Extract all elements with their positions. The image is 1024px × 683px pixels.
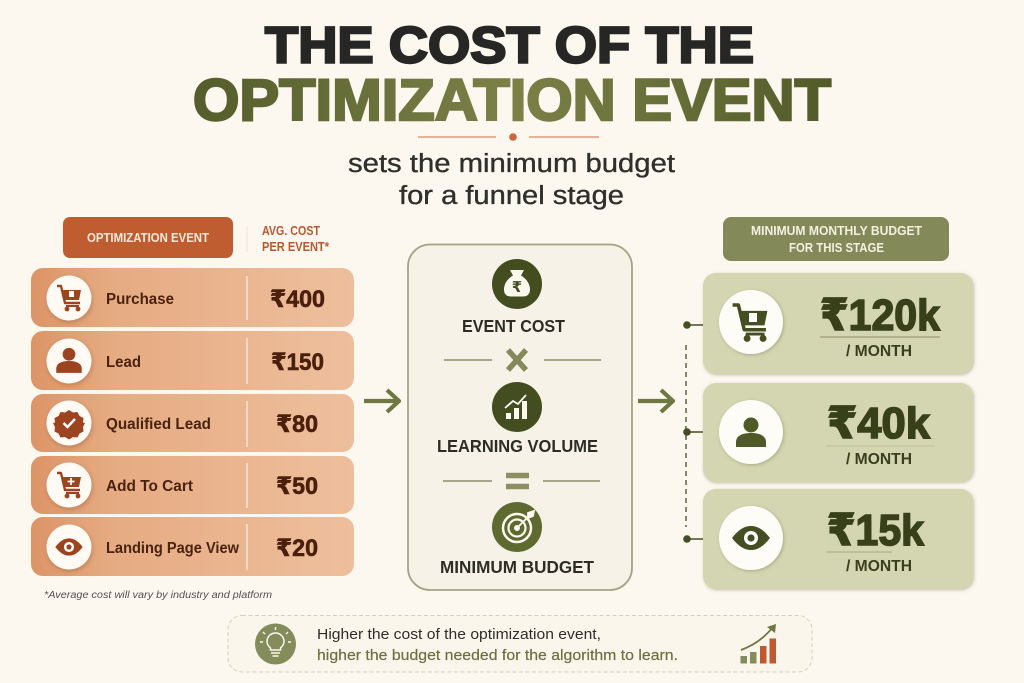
callout: takeaway xyxy=(228,616,812,672)
callout text: higher the budget needed for the algorithm to learn. xyxy=(317,647,678,664)
title xyxy=(193,16,831,133)
icon: verified badge xyxy=(53,410,85,440)
icon: target xyxy=(492,502,542,552)
header: minimum monthly budget: FOR THIS STAGE xyxy=(789,240,884,255)
card: 15k per month xyxy=(703,489,973,589)
row: lead xyxy=(31,331,354,390)
header: optimization event xyxy=(63,217,233,258)
row: qualified lead: ₹80 xyxy=(276,411,318,438)
row: lead: ₹150 xyxy=(271,349,324,376)
row: landing page view: Landing Page View xyxy=(106,540,240,557)
title line 2: OPTIMIZATION EVENT xyxy=(193,68,831,133)
row: landing page view xyxy=(31,517,354,576)
card: 40k per month: ₹40k xyxy=(827,399,931,448)
subtitle: for a funnel stage xyxy=(399,182,624,210)
callout text: Higher the cost of the optimization event, xyxy=(317,626,601,643)
card: 15k per month: ₹15k xyxy=(827,506,924,555)
row: qualified lead xyxy=(31,394,354,452)
card: 120k per month xyxy=(703,273,973,374)
panel: optimization events xyxy=(31,217,354,601)
subtitle: sets the minimum budget xyxy=(348,150,675,178)
card: 40k per month xyxy=(703,383,973,482)
icon: money bag xyxy=(492,259,542,309)
operator: multiply xyxy=(508,350,526,370)
callout text xyxy=(317,626,678,664)
row: add to cart: ₹50 xyxy=(276,473,318,500)
header: optimization event: OPTIMIZATION EVENT xyxy=(87,231,209,245)
panel: formula xyxy=(408,244,632,590)
icon: rising bars xyxy=(740,624,776,664)
title line 1: THE COST OF THE xyxy=(265,16,754,74)
row: qualified lead: Qualified Lead xyxy=(106,416,211,433)
label: minimum budget: MINIMUM BUDGET xyxy=(440,557,594,577)
subtitle xyxy=(348,150,675,210)
card: 15k per month: / MONTH xyxy=(846,558,912,575)
row: purchase: Purchase xyxy=(106,291,174,308)
header: minimum monthly budget xyxy=(723,217,949,261)
card: 120k per month: / MONTH xyxy=(846,343,912,360)
row: add to cart xyxy=(31,456,354,514)
icon: growth chart xyxy=(492,382,542,432)
header: average cost per event: PER EVENT* xyxy=(262,239,330,254)
header: average cost per event: AVG. COST xyxy=(262,223,320,238)
footnote: *Average cost will vary by industry and platform xyxy=(44,589,272,601)
row: purchase xyxy=(31,268,354,327)
icon: light bulb xyxy=(255,624,296,664)
connector xyxy=(683,321,703,543)
header: average cost per event xyxy=(262,223,330,254)
card: 40k per month: / MONTH xyxy=(846,451,912,468)
arrow: to formula xyxy=(364,390,399,412)
card: 120k per month: ₹120k xyxy=(820,291,940,340)
arrow: to budgets xyxy=(638,390,673,412)
row: lead: Lead xyxy=(106,354,141,371)
header: minimum monthly budget: MINIMUM MONTHLY BUDGET xyxy=(751,223,922,238)
label: learning volume: LEARNING VOLUME xyxy=(437,436,598,456)
row: landing page view: ₹20 xyxy=(276,535,318,562)
icon: money bag: ₹ xyxy=(512,279,522,296)
label: event cost: EVENT COST xyxy=(462,316,565,336)
row: purchase: ₹400 xyxy=(270,286,325,313)
row: add to cart: Add To Cart xyxy=(106,478,193,495)
operator: equals xyxy=(506,476,529,486)
panel: minimum monthly budgets xyxy=(683,217,973,589)
